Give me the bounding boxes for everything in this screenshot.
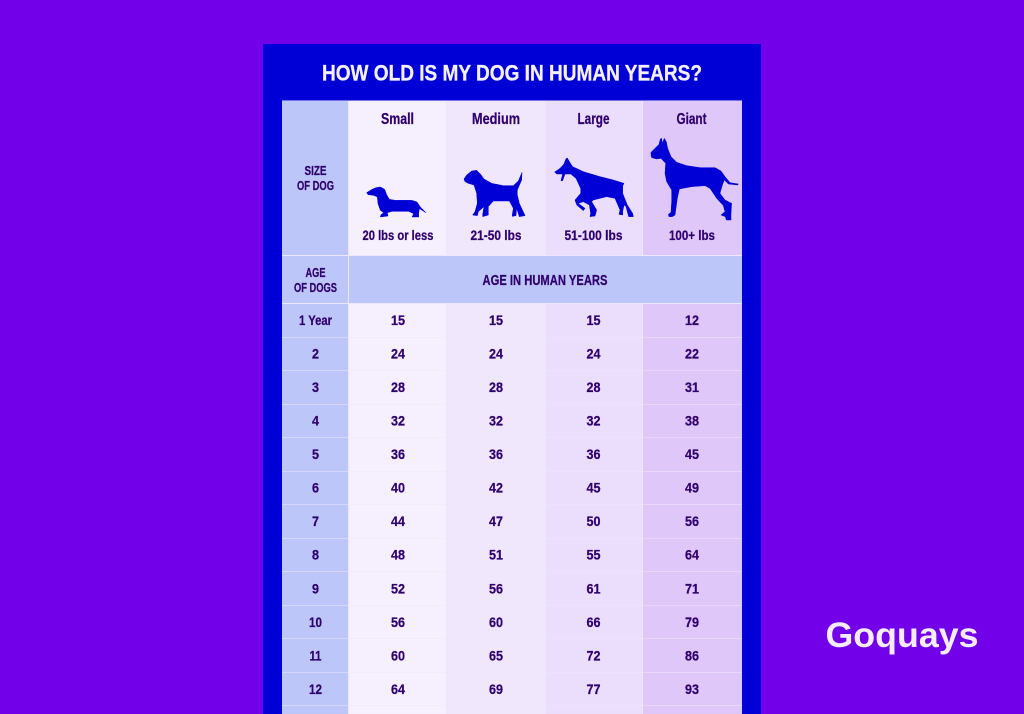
row: 9: 56 [489,580,503,596]
row: cropped row [282,706,742,714]
row: 11: 72 [586,648,601,664]
row: 4: 32 [391,412,405,428]
row: 11: 11 [310,648,322,664]
row: 1 year: 15 [489,312,503,328]
row: 4: 32 [489,412,503,428]
row: 12: 69 [489,681,503,697]
heading: medium: Medium [472,111,520,128]
heading: small: Small [381,111,414,128]
brand wordmark: Goquays [826,616,978,655]
row: 3: 31 [685,379,699,395]
row: 5 [282,438,742,471]
row: 4 [282,404,742,438]
row: 6: 42 [489,480,503,496]
row: 2: 22 [685,346,699,362]
row: 2: 24 [489,346,503,362]
row: 11: 86 [685,648,699,664]
row: 5: 36 [391,446,405,462]
row: 7 [282,505,742,538]
label: age in human years: AGE IN HUMAN YEARS [482,273,608,289]
heading: large: Large [578,111,610,128]
row: 2: 24 [586,346,601,362]
row: 3: 28 [586,379,601,395]
row: 6: 49 [685,480,699,496]
row: 10: 66 [586,614,601,630]
row: 7: 56 [685,513,699,529]
row: 9: 61 [586,580,601,596]
row: 1 year [282,304,742,337]
row: 3: 28 [391,379,405,395]
row: 8: 51 [489,546,503,562]
row: 1 year: 12 [685,312,699,328]
row: 9 [282,572,742,605]
row: 5: 5 [312,446,319,462]
row: 5: 36 [586,446,601,462]
icon: large dog [555,158,633,217]
row: 3 [282,371,742,404]
panel: dog age chart [263,44,761,714]
weight: small: 20 lbs or less [362,228,434,243]
row: 6 [282,472,742,504]
label: age of dogs: AGE [306,265,326,280]
row: 9: 71 [685,580,699,596]
row: 12: 64 [391,681,405,697]
icon: small dog [367,187,426,217]
row: 2 [282,338,742,370]
row: 3: 28 [489,379,503,395]
row: 2: 24 [391,346,405,362]
row: 5: 45 [685,446,699,462]
label: age of dogs [294,265,337,295]
row: 10: 79 [685,614,699,630]
weight: medium: 21-50 lbs [470,228,522,243]
row: 5: 36 [489,446,503,462]
row: 3: 3 [312,379,319,395]
icon: medium dog [464,170,525,217]
label: size of dog: SIZE [304,163,327,178]
row: 12: 93 [685,681,699,697]
row: 12 [282,672,742,706]
icon: giant dog [651,138,738,220]
row: 10 [282,606,742,638]
weight: large: 51-100 lbs [564,228,622,243]
row: 8 [282,538,742,572]
row: 7: 7 [312,513,319,529]
heading: giant: Giant [676,111,706,128]
row: 8: 48 [391,546,405,562]
row: 10: 56 [391,614,405,630]
label: age of dogs: OF DOGS [294,280,337,295]
row: 11: 60 [391,648,405,664]
label: size of dog [297,163,334,193]
row: 9: 52 [391,580,405,596]
row: 10: 60 [489,614,503,630]
title: HOW OLD IS MY DOG IN HUMAN YEARS? [322,60,702,86]
row: 4: 38 [685,412,699,428]
row: 7: 50 [586,513,601,529]
row: 6: 6 [312,480,319,496]
row: 4: 32 [586,412,601,428]
label: size of dog: OF DOG [297,178,334,193]
row: 1 year: 1 Year [299,312,332,328]
row: 7: 47 [489,513,503,529]
header row: age [282,256,742,303]
row: 7: 44 [391,513,405,529]
row: 8: 64 [685,546,699,562]
row: 10: 10 [309,614,322,630]
header row: size of dog [282,101,742,255]
weight: giant: 100+ lbs [669,228,715,243]
row: 8: 55 [586,546,601,562]
table [282,100,742,714]
row: 11 [282,639,742,672]
row: 2: 2 [312,346,319,362]
row: 4: 4 [312,412,319,428]
row: 8: 8 [312,546,319,562]
row: 12: 77 [586,681,601,697]
row: 1 year: 15 [586,312,601,328]
row: 1 year: 15 [391,312,405,328]
row: 12: 12 [309,681,322,697]
row: 6: 40 [391,480,405,496]
row: 6: 45 [586,480,601,496]
row: 9: 9 [312,580,319,596]
row: 11: 65 [489,648,503,664]
